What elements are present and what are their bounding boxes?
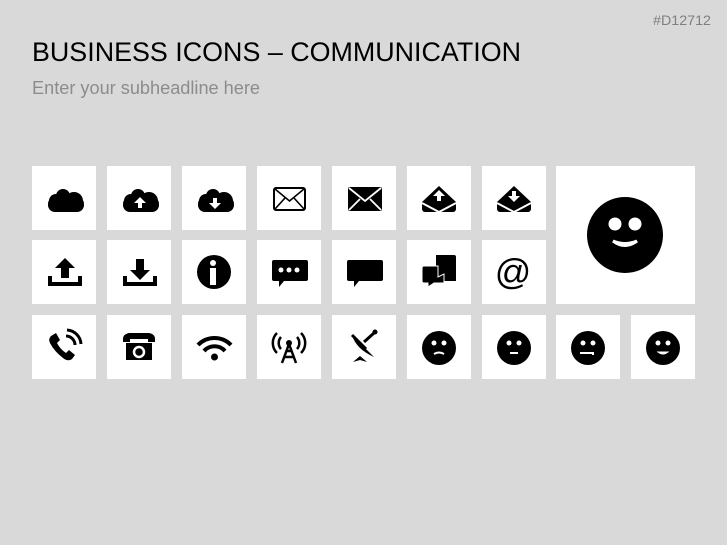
tile: skeptical face <box>556 315 620 379</box>
tile: phone calling <box>32 315 96 379</box>
tile: mail upload <box>407 166 471 230</box>
tile: envelope outline <box>257 166 321 230</box>
tile: upload tray <box>32 240 96 304</box>
tile: download tray <box>107 240 171 304</box>
tile: envelope filled <box>332 166 396 230</box>
tile: at sign: @ <box>495 251 531 292</box>
tile: info <box>182 240 246 304</box>
tile: conversation <box>407 240 471 304</box>
tile: sad face <box>407 315 471 379</box>
subheadline: Enter your subheadline here <box>32 78 260 98</box>
tile: cloud upload <box>107 166 171 230</box>
tile: wifi <box>182 315 246 379</box>
tile: cloud <box>32 166 96 230</box>
tile: cloud download <box>182 166 246 230</box>
tile: at sign <box>482 240 546 304</box>
tile: mail download <box>482 166 546 230</box>
tile: satellite dish <box>332 315 396 379</box>
code label: #D12712 <box>653 12 711 28</box>
tile: chat dots <box>257 240 321 304</box>
tile: big smiley <box>556 166 695 304</box>
tile: smile face <box>631 315 695 379</box>
tile: neutral face <box>482 315 546 379</box>
title: BUSINESS ICONS – COMMUNICATION <box>32 37 521 67</box>
tile: chat bubble <box>332 240 396 304</box>
tile: antenna <box>257 315 321 379</box>
tile: desk phone <box>107 315 171 379</box>
icon grid <box>32 166 695 379</box>
